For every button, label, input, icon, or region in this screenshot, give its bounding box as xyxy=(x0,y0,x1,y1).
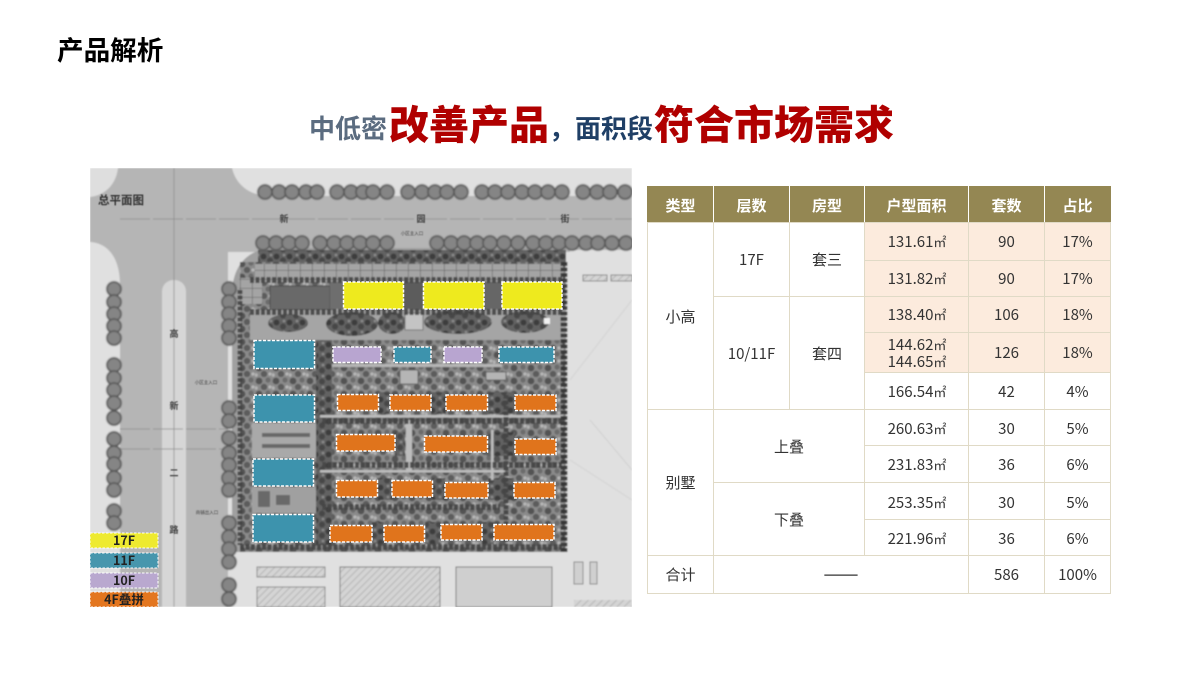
table header: 6% xyxy=(1066,528,1089,549)
table header: 36 xyxy=(998,454,1015,474)
table header: 17% xyxy=(1062,231,1093,252)
headline: ，面积段 xyxy=(549,109,653,146)
table header: 10/11F xyxy=(728,342,775,364)
table header: 6% xyxy=(1066,454,1089,474)
map labels: 街 xyxy=(560,213,570,224)
table total row: —— xyxy=(823,558,859,588)
table total row: 586 xyxy=(994,564,1019,585)
map labels: 高 xyxy=(169,328,179,339)
street trees xyxy=(107,185,633,606)
table header: 18% xyxy=(1062,342,1093,363)
table total row: 100% xyxy=(1058,564,1097,585)
table header: 17F xyxy=(739,249,764,270)
table header: 253.35㎡ xyxy=(888,492,945,512)
legend: 10F: 10F xyxy=(113,570,135,589)
legend: 11F: 11F xyxy=(113,550,135,569)
table header: 36 xyxy=(998,528,1015,549)
table total row: 合计 xyxy=(665,564,696,585)
map labels: 园 xyxy=(416,214,426,224)
buildings: 10F xyxy=(333,347,482,362)
map labels: 新 xyxy=(169,400,179,411)
table header: 5% xyxy=(1066,418,1089,439)
clubhouse xyxy=(270,286,330,310)
map labels: 小区主入口 xyxy=(195,379,217,386)
central court xyxy=(322,364,506,384)
product table xyxy=(647,186,1111,594)
headline xyxy=(309,93,894,151)
tree shade between houses xyxy=(316,340,515,545)
table header: 套四 xyxy=(812,342,842,364)
site block xyxy=(232,248,566,552)
map labels: 小区主入口 xyxy=(401,230,423,237)
table header xyxy=(648,187,1110,588)
table header: 房型 xyxy=(812,195,842,216)
headline: 符合市场需求 xyxy=(654,93,894,151)
table header: 106 xyxy=(994,304,1019,325)
table header: 4% xyxy=(1066,380,1089,402)
table header: 42 xyxy=(998,380,1015,402)
road median xyxy=(162,280,186,607)
table header: 131.82㎡ xyxy=(888,268,945,289)
north green xyxy=(250,310,565,340)
roads xyxy=(90,168,632,607)
table header: 126 xyxy=(994,342,1019,363)
road corner at top left xyxy=(90,168,118,197)
map labels: 商铺出入口 xyxy=(196,509,218,516)
buildings: 11F xyxy=(253,340,554,542)
map labels xyxy=(98,193,570,535)
table header: 下叠 xyxy=(774,508,804,530)
table header: 类型 xyxy=(665,195,696,216)
table total row xyxy=(665,558,1097,588)
table header: 套数 xyxy=(991,195,1022,216)
map labels: 新 xyxy=(279,213,289,224)
table header: 260.63㎡ xyxy=(888,418,945,439)
north plaza xyxy=(255,264,563,282)
headline: 中低密 xyxy=(309,109,387,146)
west courtyards xyxy=(250,368,318,395)
table header: 套三 xyxy=(812,249,842,270)
title: 产品解析 xyxy=(57,29,163,68)
table header: 层数 xyxy=(736,195,766,216)
landscape tint xyxy=(570,300,632,500)
table header: 上叠 xyxy=(774,436,804,456)
hedges xyxy=(240,262,565,552)
table header: 90 xyxy=(998,231,1015,252)
legend xyxy=(90,530,158,608)
table header: 占比 xyxy=(1062,195,1092,216)
table header: 90 xyxy=(998,268,1015,289)
site plan xyxy=(90,168,632,607)
south parcels xyxy=(257,567,325,577)
table header: 30 xyxy=(998,492,1015,512)
map labels: 二 xyxy=(169,468,179,478)
table header: 5% xyxy=(1066,492,1089,512)
map labels: 总平面图 xyxy=(98,193,144,207)
internal walks xyxy=(320,415,563,480)
headline: 改善产品 xyxy=(389,93,549,151)
table header: 小高 xyxy=(665,306,696,326)
legend: 17F: 17F xyxy=(113,530,135,549)
table header: 18% xyxy=(1062,304,1093,325)
table header: 138.40㎡ xyxy=(888,304,945,325)
table header: 30 xyxy=(998,418,1015,439)
map labels: 路 xyxy=(169,524,179,535)
table header: 131.61㎡ xyxy=(888,231,945,252)
table header: 17% xyxy=(1062,268,1093,289)
base map xyxy=(90,168,633,607)
table header: 166.54㎡ xyxy=(888,380,945,402)
table header: 别墅 xyxy=(665,472,696,493)
table header: 231.83㎡ xyxy=(888,454,945,474)
buildings: 17F xyxy=(344,282,562,309)
buildings: 4F stacked xyxy=(330,394,556,542)
table header: 144.62㎡ xyxy=(888,334,945,354)
table header: 户型面积 xyxy=(886,195,946,216)
table header: 144.65㎡ xyxy=(888,350,945,372)
table header: 221.96㎡ xyxy=(888,528,945,549)
